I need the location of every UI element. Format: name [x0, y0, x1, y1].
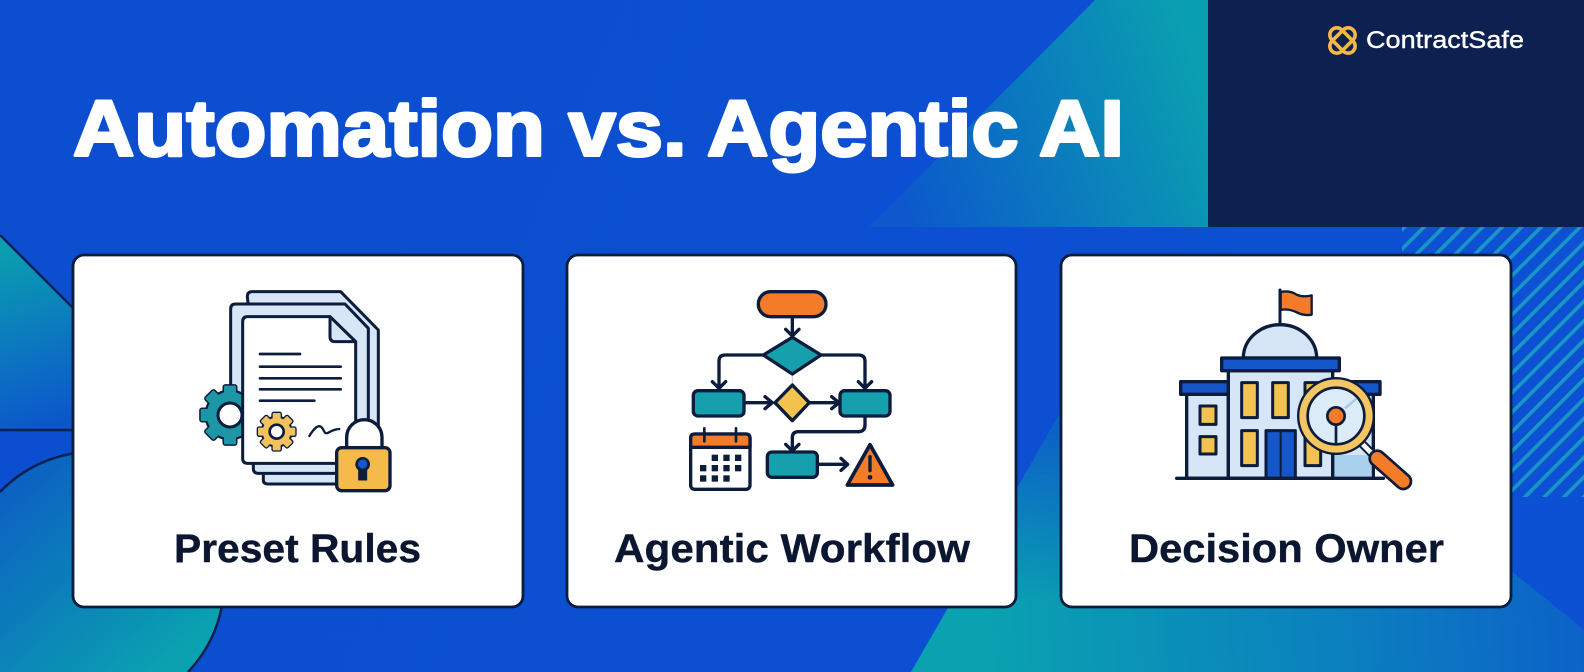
card background: [567, 255, 1016, 607]
side wings: [1181, 382, 1380, 478]
yellow diamond: [775, 385, 809, 421]
central block: [1228, 371, 1333, 478]
label: Decision Owner: Decision Owner: [1129, 527, 1444, 571]
central roof: [1222, 358, 1339, 371]
decision diamond: [763, 337, 821, 374]
ground line: [1177, 473, 1383, 483]
panel: Decision Owner: [1061, 255, 1511, 607]
logo wordmark: ContractSafe: [1366, 27, 1524, 54]
icon: teal gear: [201, 386, 259, 444]
icon: flowchart with calendar and warning: [691, 292, 893, 489]
icon: warning triangle: [847, 445, 893, 485]
icon: magnifying glass: [1297, 377, 1403, 481]
icon: yellow gear: [258, 413, 295, 450]
card background: [73, 255, 523, 607]
windows: [1200, 383, 1321, 466]
title: Automation vs. Agentic AI: [73, 84, 1124, 172]
card background: [1061, 255, 1511, 607]
icon: documents with gears and padlock: [201, 292, 390, 491]
flag: [1280, 290, 1312, 325]
logo: ContractSafe: [1327, 25, 1524, 56]
background shape: diagonal stripes: [1402, 227, 1584, 497]
label: Agentic Workflow: Agentic Workflow: [614, 527, 971, 571]
panel: Agentic Workflow: [567, 255, 1016, 607]
background shape: left circle: [0, 452, 224, 672]
background shape: bottom teal polygon: [911, 412, 1584, 672]
process box right: [840, 391, 890, 416]
icon: padlock: [337, 420, 390, 491]
background shape: navy panel: [1208, 0, 1584, 227]
icon: government building with magnifying glass: [1177, 290, 1403, 481]
signature: [309, 426, 339, 436]
label: Preset Rules: Preset Rules: [174, 527, 421, 571]
icon: logo mark: [1327, 25, 1358, 56]
process box bottom: [767, 452, 817, 477]
background shape: top teal triangle: [869, 0, 1208, 227]
dome: [1243, 325, 1317, 358]
icon: calendar: [691, 428, 750, 489]
background shape: left triangle: [0, 235, 74, 430]
process box left: [693, 391, 744, 416]
start pill: [758, 292, 826, 317]
door: [1266, 431, 1295, 478]
panel: Preset Rules: [73, 255, 523, 607]
